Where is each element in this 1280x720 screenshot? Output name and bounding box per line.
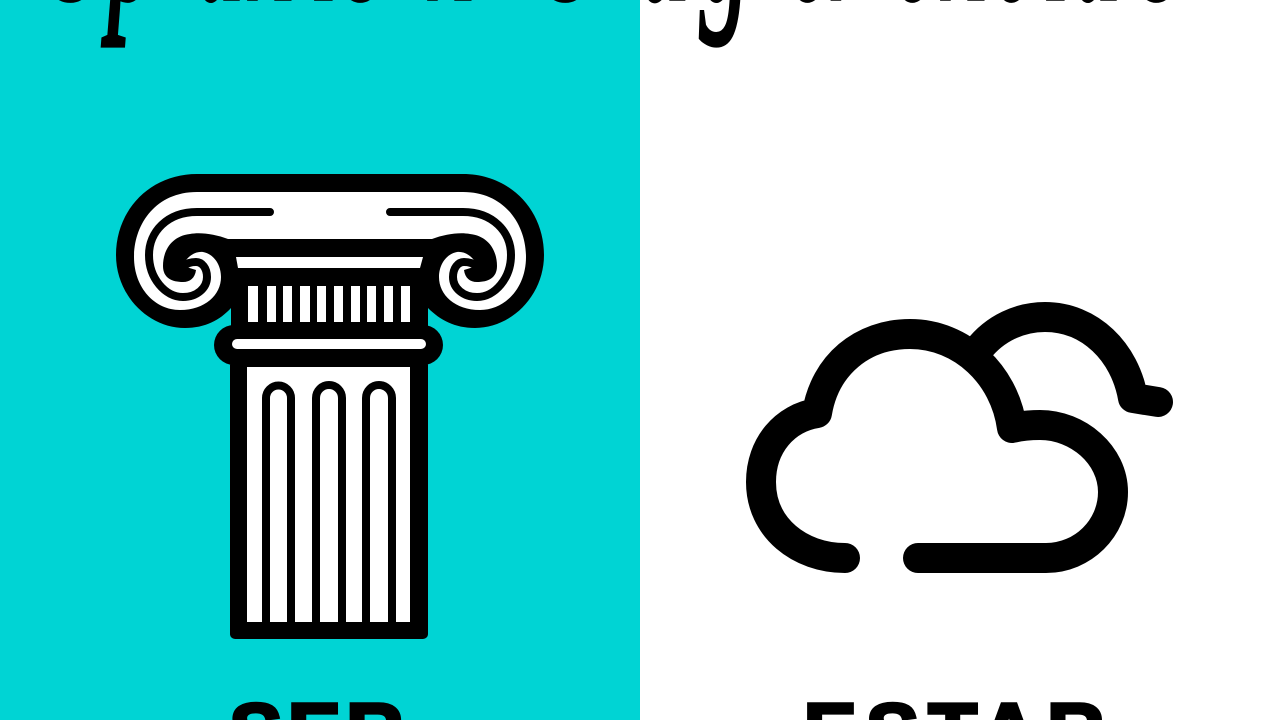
shaft (230, 360, 428, 639)
abacus strip (236, 257, 423, 268)
icon: cloud (761, 317, 1158, 558)
panel: ser background (0, 0, 640, 720)
right volute (329, 192, 526, 310)
front cloud (761, 334, 1113, 558)
left volute (134, 192, 331, 310)
ring (214, 325, 443, 365)
frieze bars (248, 286, 410, 322)
flutes (266, 385, 392, 622)
capital silhouette (116, 174, 544, 330)
back cloud (978, 317, 1158, 402)
shaft interior (247, 367, 410, 622)
icon: ionic column (116, 174, 544, 639)
ring highlight (232, 339, 426, 349)
panel: estar background (640, 0, 1280, 720)
